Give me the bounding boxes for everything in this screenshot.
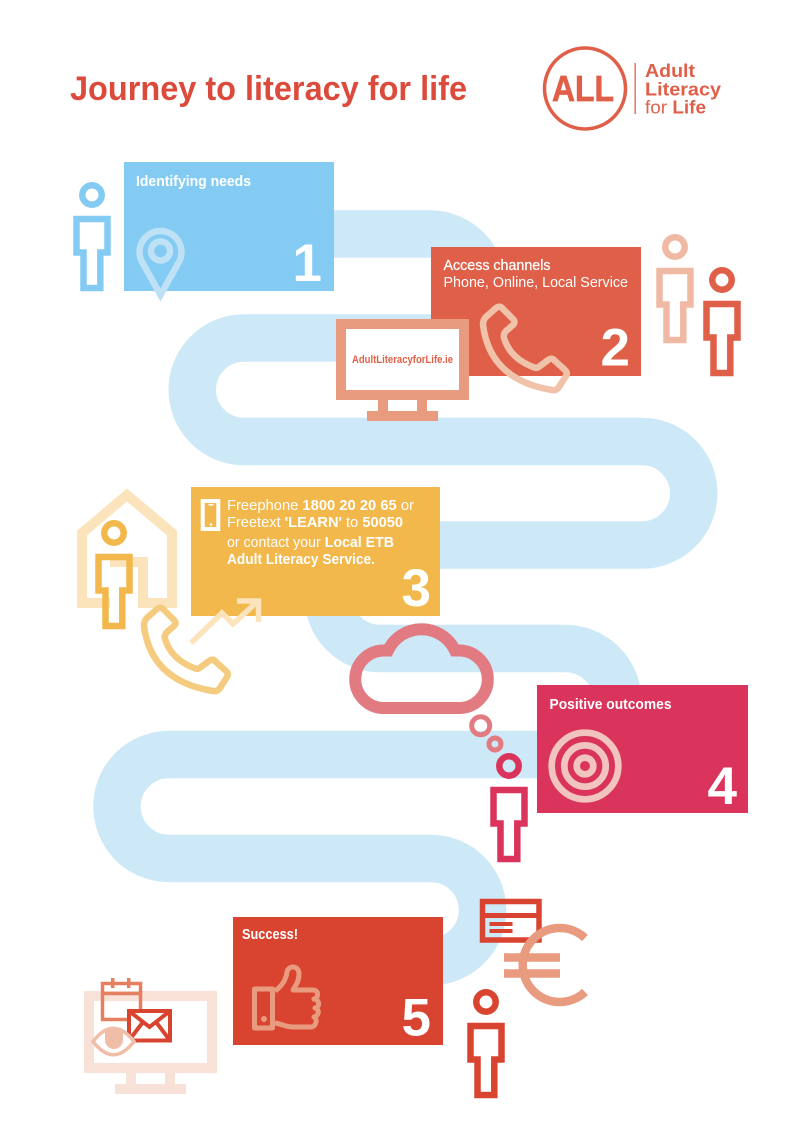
panel 3 background <box>191 487 440 616</box>
panel 2 heading: Access channels <box>444 258 550 274</box>
panel 2 background <box>431 247 641 376</box>
panel 2 channels: Phone, Online, Local Service <box>444 275 628 291</box>
panel 4 background <box>537 685 748 813</box>
icon: location pin <box>140 231 181 295</box>
panel 4 heading: Positive outcomes <box>550 697 672 713</box>
panel 2: access channels <box>431 247 641 378</box>
icon: envelope <box>129 1011 170 1040</box>
logo wordmark: Adult <box>645 61 695 81</box>
panel 1: identifying needs <box>124 162 334 295</box>
icon: monitor with web address <box>336 319 469 421</box>
icon: thumbs up <box>254 967 319 1028</box>
logo wordmark: Literacy <box>645 80 721 100</box>
number 3: 3 <box>402 559 431 618</box>
logo divider <box>634 63 636 114</box>
icon: calendar <box>102 978 140 1020</box>
contact text: Adult Literacy Service. <box>227 552 375 568</box>
panel 5 background <box>233 917 443 1045</box>
number 1: 1 <box>293 234 322 293</box>
number 5: 5 <box>402 988 431 1048</box>
monitor frame <box>336 319 469 421</box>
logo <box>544 48 721 129</box>
icon: desktop monitor <box>84 991 217 1094</box>
web address: AdultLiteracyforLife.ie <box>352 354 453 366</box>
panel 1 background <box>124 162 334 291</box>
thought bubble large <box>472 717 490 735</box>
panel 5 heading: Success! <box>242 927 298 943</box>
eye outline <box>93 1028 134 1055</box>
person 2a <box>660 237 690 340</box>
thought bubble small <box>489 738 501 750</box>
logo initials: ALL <box>552 68 614 109</box>
eye iris <box>105 1030 123 1049</box>
logo ring <box>544 48 626 129</box>
icon: target <box>552 733 618 799</box>
contact text: Freetext 'LEARN' to 50050 <box>227 515 403 531</box>
logo wordmark <box>645 61 721 118</box>
contact text: Freephone 1800 20 20 65 or <box>227 498 414 514</box>
title: Journey to literacy for life <box>70 70 467 108</box>
logo wordmark: for Life <box>645 98 706 118</box>
icon: thought cloud <box>355 629 501 750</box>
icon: mobile phone <box>203 501 218 529</box>
winding road <box>117 234 694 962</box>
monitor screen <box>346 329 459 390</box>
panel 3: contact details <box>191 487 440 618</box>
icon: eye <box>93 1028 134 1055</box>
number 4: 4 <box>708 757 738 816</box>
icon: house <box>82 495 172 603</box>
panel 4: positive outcomes <box>537 685 748 816</box>
person 3 <box>98 523 130 626</box>
person 1 <box>76 185 108 288</box>
contact text <box>227 498 414 568</box>
icon: telephone (panel 2) <box>483 307 567 390</box>
contact text: or contact your Local ETB <box>227 535 394 551</box>
icon: rising arrow <box>191 601 258 643</box>
icon: bank card <box>482 902 540 940</box>
icon: euro sign <box>504 928 585 1002</box>
panel 1 heading: Identifying needs <box>136 174 251 190</box>
panel 5: success <box>233 917 443 1048</box>
person 5 <box>470 992 502 1095</box>
icon: telephone (panel 3) <box>144 608 228 691</box>
cloud outline <box>355 629 488 708</box>
person 2b <box>706 270 738 373</box>
person 4 <box>494 756 524 859</box>
number 2: 2 <box>601 318 630 378</box>
